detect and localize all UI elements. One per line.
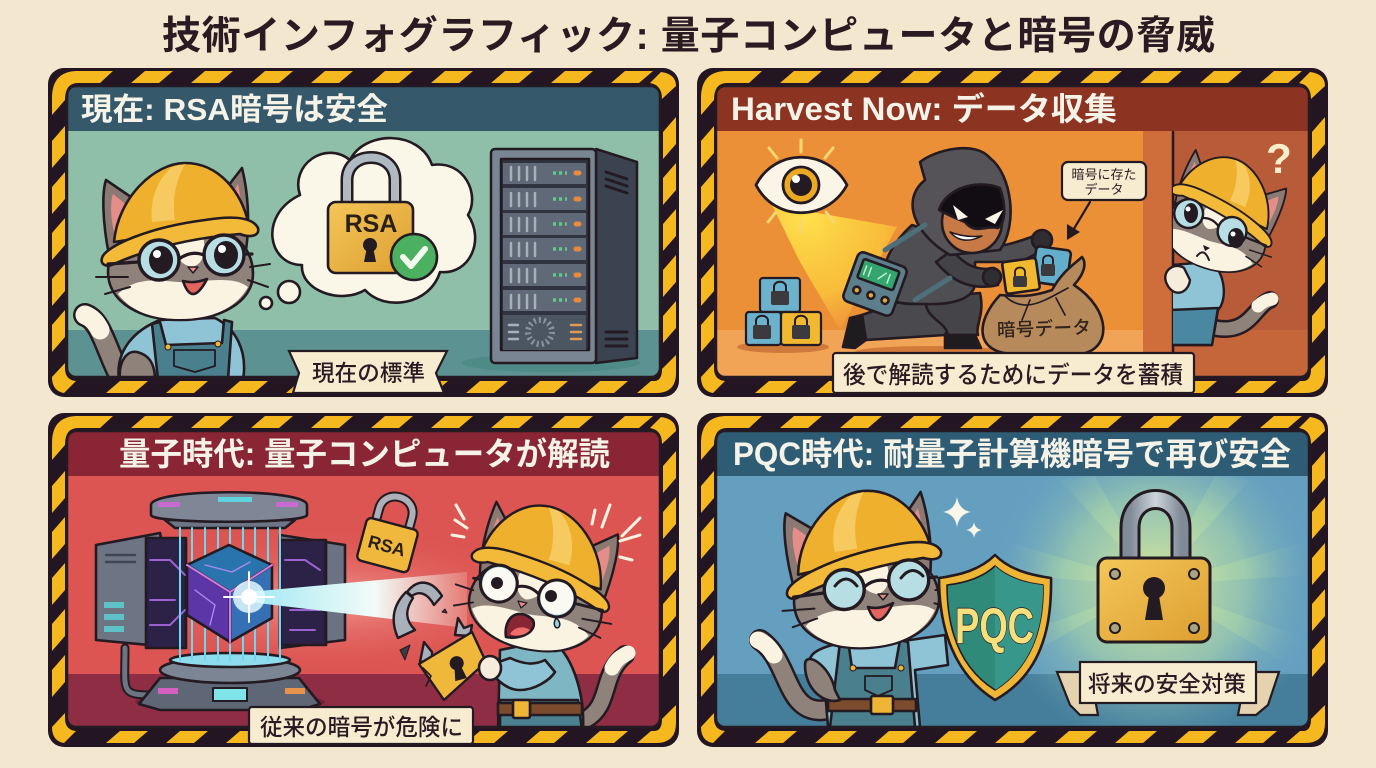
cat engineer, shocked bbox=[447, 493, 630, 730]
heading: Harvest Now: データ収集 bbox=[731, 91, 1117, 127]
icon: server rack bbox=[462, 149, 640, 372]
hazard frame bbox=[48, 413, 679, 747]
sparkles bbox=[943, 497, 982, 538]
quantum beam bbox=[224, 572, 467, 628]
cat engineer, happy bbox=[85, 163, 270, 380]
sack of encrypted data bbox=[983, 246, 1103, 354]
panel scene bbox=[67, 431, 660, 730]
callout: encrypted stored data: 暗号に存た bbox=[1071, 167, 1137, 182]
glow rays bbox=[1014, 476, 1296, 726]
ribbon label: future safety measures: 将来の安全対策 bbox=[1088, 672, 1246, 697]
icon: PQC shield bbox=[939, 555, 1051, 700]
panel scene bbox=[717, 432, 1308, 726]
icon: flying RSA padlock bbox=[356, 492, 419, 574]
panel: PQC era bbox=[697, 413, 1328, 750]
panel scene bbox=[67, 86, 660, 380]
title: 技術インフォグラフィック: 量子コンピュータと暗号の脅威 bbox=[162, 15, 1215, 58]
panel: current RSA is safe bbox=[48, 68, 679, 397]
label: store for later decryption bbox=[833, 353, 1194, 393]
heading: PQC時代: 耐量子計算機暗号で再び安全 bbox=[733, 436, 1291, 472]
panel scene bbox=[716, 86, 1309, 377]
callout: encrypted stored data: データ bbox=[1084, 182, 1124, 197]
icon: RSA padlock with check: RSA bbox=[345, 210, 397, 238]
ribbon label: future safety measures bbox=[1057, 662, 1279, 715]
heading: 量子時代: 量子コンピュータが解読 bbox=[119, 436, 610, 472]
quantum computer bbox=[96, 492, 345, 711]
question mark: ? bbox=[1266, 135, 1292, 182]
shock marks bbox=[452, 505, 640, 560]
panel: harvest now bbox=[697, 68, 1328, 397]
sack label: 暗号データ bbox=[997, 316, 1091, 341]
heading: 現在: RSA暗号は安全 bbox=[81, 92, 388, 127]
hazard frame bbox=[697, 413, 1328, 747]
label: store for later decryption: 後で解読するためにデータを蓄積 bbox=[843, 361, 1183, 389]
cat engineer peeking from door bbox=[1164, 149, 1288, 346]
hooded data thief bbox=[842, 148, 1052, 358]
icon: RSA padlock with check bbox=[328, 158, 437, 280]
label: conventional crypto at risk bbox=[249, 707, 473, 744]
icon: golden padlock bbox=[1098, 500, 1210, 642]
thought bubble bbox=[260, 138, 475, 309]
hazard frame bbox=[697, 68, 1328, 397]
icon: flying RSA padlock: RSA bbox=[366, 531, 408, 561]
icon: stacked locked data blocks bbox=[737, 278, 829, 353]
panel: quantum era bbox=[48, 413, 679, 747]
icon: PQC shield: PQC bbox=[955, 598, 1034, 654]
callout: encrypted stored data bbox=[1062, 162, 1146, 240]
hazard frame bbox=[48, 68, 679, 397]
ribbon label: current standard: 現在の標準 bbox=[312, 361, 425, 386]
label: conventional crypto at risk: 従来の暗号が危険に bbox=[260, 714, 463, 740]
ribbon label: current standard bbox=[289, 351, 447, 393]
icon: broken padlock bbox=[394, 583, 486, 700]
cat engineer with shield bbox=[758, 485, 959, 727]
icon: watching eye bbox=[756, 140, 847, 232]
surveillance light cone bbox=[772, 205, 897, 330]
